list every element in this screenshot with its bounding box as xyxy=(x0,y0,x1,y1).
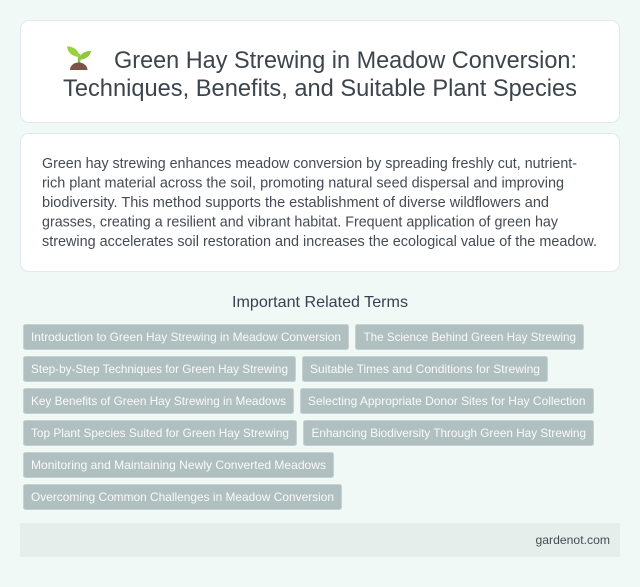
footer: gardenot.com xyxy=(536,533,610,547)
tag: Suitable Times and Conditions for Strewing xyxy=(310,362,540,376)
icon: sprout xyxy=(67,46,91,70)
tag xyxy=(24,388,294,414)
text block: description xyxy=(42,156,597,250)
panel: title header xyxy=(20,20,620,122)
text block: description: biodiversity. This method supports the establishment of diverse wildflowers and xyxy=(42,195,549,211)
tag xyxy=(24,356,296,382)
tag: Monitoring and Maintaining Newly Converted Meadows xyxy=(31,458,326,472)
tag: Step-by-Step Techniques for Green Hay Strewing xyxy=(31,362,288,376)
tag: The Science Behind Green Hay Strewing xyxy=(364,330,576,344)
tag xyxy=(356,324,584,350)
title: Techniques, Benefits, and Suitable Plant Species xyxy=(63,75,577,102)
tag: Selecting Appropriate Donor Sites for Hay Collection xyxy=(308,394,586,408)
tag list xyxy=(24,324,594,510)
tag xyxy=(24,484,342,510)
text block: description: Green hay strewing enhances meadow conversion by spreading freshly cut, nutrient- xyxy=(42,156,577,172)
tag: Enhancing Biodiversity Through Green Hay Strewing xyxy=(312,426,586,440)
panel: description xyxy=(20,134,620,272)
heading: related terms: Important Related Terms xyxy=(232,294,408,311)
text block: description: strewing accelerates soil restoration and increases the ecological value of the meadow. xyxy=(42,234,597,250)
tag: Key Benefits of Green Hay Strewing in Meadows xyxy=(31,394,286,408)
tag xyxy=(24,324,348,350)
title xyxy=(63,47,577,102)
tag xyxy=(24,452,334,478)
tag: Introduction to Green Hay Strewing in Meadow Conversion xyxy=(31,330,341,344)
tag: Overcoming Common Challenges in Meadow Conversion xyxy=(31,490,334,504)
tag: Top Plant Species Suited for Green Hay Strewing xyxy=(31,426,289,440)
tag xyxy=(302,356,548,382)
text block: description: rich plant material across the soil, promoting natural seed dispersal and improving xyxy=(42,176,564,192)
footer xyxy=(20,523,620,557)
title: Green Hay Strewing in Meadow Conversion: xyxy=(114,47,577,74)
tag xyxy=(24,420,296,446)
text block: description: grasses, creating a resilient and vibrant habitat. Frequent application of green hay xyxy=(42,214,559,230)
tag xyxy=(304,420,594,446)
tag xyxy=(300,388,594,414)
